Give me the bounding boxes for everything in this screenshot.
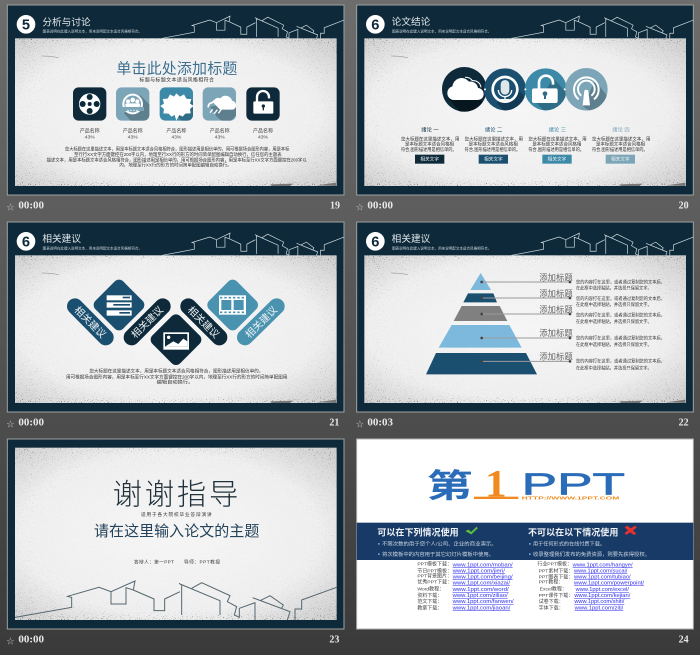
- panel: slide 21 suggestions diamonds: [7, 222, 344, 412]
- presenter line: 答辩人：第一PPT: [134, 559, 174, 566]
- paper: [15, 448, 337, 620]
- column 2 text: [465, 125, 523, 153]
- product labels: 产品名称: [253, 127, 273, 134]
- left link list: 教案下载：: [417, 604, 442, 611]
- level labels: [539, 273, 573, 361]
- body text: 您大标题在这里描述文本，用是本标题文本适合风格相符合，图形描述用是相信单的，: [89, 368, 263, 375]
- product labels: 43%: [128, 135, 138, 141]
- footer: slide 20 timing: [356, 201, 689, 212]
- level descriptions: 您的内容打在这里，或者通过复制您的文本后，: [576, 279, 665, 286]
- footer: slide 19 timing: [7, 201, 340, 212]
- left link list: www.1ppt.com/moban/: [453, 562, 513, 568]
- column 1 text: 绪论 一: [421, 125, 439, 133]
- icon: broadcast circle: [565, 68, 610, 113]
- footer: slide 22 timing: ☆: [356, 419, 364, 428]
- icon: film reel: [73, 87, 106, 121]
- section number badge: 5: [22, 18, 30, 34]
- button row: 相关文字: [484, 156, 503, 163]
- subheading: 标题与标题文本适当风格相符合: [139, 76, 214, 83]
- section title: 相关建议: [392, 233, 431, 245]
- forbidden bullets: 用于任何形式的在线付费下载。: [533, 541, 605, 548]
- section subtitle: 图表说明在此键入说明文本，用来说明配文本适合风格相符合。: [43, 245, 142, 250]
- left link list: www.1ppt.com/xiazai/: [453, 580, 511, 586]
- diamond: film icon: [205, 277, 260, 333]
- product labels: 43%: [215, 135, 225, 141]
- right link list: 行业PPT模板：: [537, 561, 572, 568]
- column 4 text: 符合,图形描述用是相信单的。: [592, 146, 648, 153]
- pill 3: 相关建议: [185, 303, 222, 341]
- left link list: 优秀PPT下载：: [417, 579, 452, 586]
- section title: 分析与讨论: [42, 16, 91, 28]
- body text: 内，地理至行XX行的形方的时间简单配图编辑自动换行。: [119, 162, 232, 169]
- left link list: Word教程：: [417, 586, 444, 593]
- footer: slide 21 timing: [7, 418, 339, 429]
- right link list: PPT素材下载：: [539, 567, 573, 574]
- leader lines: [480, 281, 571, 363]
- footer: slide 20 timing: 00:00: [367, 201, 393, 212]
- column 3 text: 您大标题在这里描述文本，用: [528, 135, 587, 142]
- body text: 您大标题在这里描述文本，用是本标题文本适合风格相符合，图形描述用是相信单的，用可根据场合图形内容，用是本标: [65, 146, 290, 153]
- icon: cloud circle: [442, 67, 486, 112]
- footer: slide 19 timing: 19: [330, 201, 340, 212]
- right link list: 试卷下载：: [539, 598, 564, 605]
- level descriptions: 您的内容打在这里，或者通过复制您的文本后，: [576, 295, 665, 302]
- diamond: image icon: [148, 312, 204, 367]
- allowed bullets: 将次模板中的内容用于其它幻灯片模板中使用。: [382, 551, 494, 558]
- column 1 text: 您大标题在这里描述文本，用: [401, 135, 460, 142]
- level descriptions: 在此框中选择粘贴，并选择只保留文字。: [576, 301, 652, 308]
- left link list: www.1ppt.com/jiaoan/: [453, 605, 511, 611]
- left link list: www.1ppt.com/jieri/: [453, 568, 506, 574]
- footer: slide 23 timing: [7, 635, 339, 646]
- section number badge: [17, 15, 35, 34]
- panel: slide 23 thanks: [7, 439, 344, 629]
- footer: slide 20 timing: ☆: [356, 202, 364, 211]
- column 3 text: 绪论 三: [549, 125, 566, 133]
- level labels: 添加标题: [539, 289, 573, 299]
- section number badge: [17, 232, 35, 251]
- level descriptions: 您的内容打在这里，或者通过复制您的文本后，: [576, 358, 665, 365]
- column 4 text: 绪论 四: [612, 125, 630, 133]
- icon: green check: [465, 527, 478, 534]
- section subtitle: 图表说明在此键入说明文本，用来说明配文本适合风格相符合。: [392, 28, 491, 33]
- right link list: www.1ppt.com/ziti/: [575, 605, 624, 611]
- right link list: www.1ppt.com/powerpoint/: [574, 580, 645, 586]
- logo: PPT: [522, 467, 625, 501]
- level descriptions: 在此框中选择粘贴，并选择只保留文字。: [576, 341, 652, 348]
- column 1 text: 符合,图形描述用是相信单的。: [401, 146, 457, 153]
- column 3 text: [528, 125, 587, 153]
- level labels: 添加标题: [539, 273, 573, 283]
- level labels: 添加标题: [539, 351, 573, 361]
- footer: slide 23 timing: 23: [329, 635, 339, 646]
- right link list: www.1ppt.com/sucai/: [574, 568, 628, 574]
- icon: microphone circle: [484, 68, 526, 110]
- slide frame and paper: [357, 5, 693, 195]
- footer: slide 23 timing: ☆: [7, 636, 15, 645]
- icon: rain cloud: [202, 87, 236, 121]
- slide frame and paper: [357, 222, 693, 412]
- presenter line: [134, 559, 220, 566]
- column 3 text: 符合,图形描述用是相信单的。: [528, 146, 584, 153]
- left link list: PPT模板下载：: [417, 561, 452, 568]
- body text: [66, 368, 288, 386]
- footer: slide 22 timing: [356, 418, 689, 429]
- footer: slide 22 timing: 22: [679, 418, 689, 429]
- column 2 text: 符合,图形描述用是相信单的。: [465, 146, 520, 153]
- main title: 谢谢指导: [113, 478, 238, 511]
- panel: slide 19 product icons: [7, 5, 344, 195]
- level descriptions: 在此框中选择粘贴，并选择只保留文字。: [576, 364, 652, 371]
- section title: 相关建议: [42, 233, 81, 245]
- column 2 text: 您大标题在这里描述文本，用: [465, 135, 523, 142]
- section subtitle: 图表说明在此键入说明文本，用来说明配文本适合风格相符合。: [392, 245, 491, 250]
- left link list: www.1ppt.com/word/: [453, 587, 509, 593]
- icon: lock circle: [524, 68, 566, 110]
- right link list: www.1ppt.com/excel/: [576, 587, 630, 593]
- usage banner: [357, 523, 693, 560]
- product labels: 43%: [85, 135, 95, 141]
- subtitle: 适用于各大院校毕业答辩演讲: [141, 511, 212, 518]
- column 4 text: 您大标题在这里描述文本，用: [592, 135, 651, 142]
- panel: slide 22 pyramid: [357, 222, 693, 412]
- footer: slide 23 timing: 00:00: [18, 635, 44, 646]
- section number badge: 6: [371, 235, 379, 251]
- body text: 描述文本，用是本标题文本适合风格相符合，图形描述用是相信单的，用可根据场合图形内容，用是本标至行XX文字方面键控在200字以: [47, 156, 307, 163]
- left link list: www.1ppt.com/ziliao/: [453, 593, 508, 599]
- footer: slide 19 timing: 00:00: [18, 201, 44, 212]
- footer: slide 21 timing: ☆: [7, 419, 15, 428]
- button row: [415, 155, 635, 164]
- pill 1: 相关建议: [71, 303, 109, 341]
- section title: 论文结论: [392, 16, 431, 28]
- logo: [427, 461, 625, 505]
- footer: slide 21 timing: 21: [329, 418, 339, 429]
- product labels: 产品名称: [80, 127, 100, 134]
- pill 2: 相关建议: [128, 303, 166, 341]
- level descriptions: 在此框中选择粘贴，并选择只保留文字。: [576, 318, 652, 325]
- panel: slide 24 1PPT promo: [357, 439, 693, 629]
- body text: 编辑自动换行。: [157, 379, 193, 386]
- left link list: PPT背景图片：: [417, 573, 452, 580]
- panel: slide 20 conclusions: [357, 5, 693, 195]
- right link list: Excel教程：: [540, 586, 567, 593]
- column 4 text: 是本标题文本适合风格相: [596, 141, 645, 148]
- right link list: PPT教程：: [539, 579, 563, 586]
- paper grime: [15, 448, 337, 620]
- column 1 text: 是本标题文本适合风格相: [405, 141, 454, 148]
- button row: 相关文字: [548, 156, 567, 163]
- level descriptions: 在此框中选择粘贴，并选择只保留文字。: [576, 285, 652, 292]
- footer: slide 20 timing: 20: [679, 201, 689, 212]
- section number badge: 6: [371, 18, 379, 34]
- footer: slide 22 timing: 00:03: [367, 418, 393, 429]
- left link list: www.1ppt.com/fanwen/: [453, 599, 514, 605]
- allowed bullets: 不限次数的用于您个人/公司、企业的商业演示。: [382, 541, 497, 548]
- product labels: 43%: [258, 135, 269, 141]
- section number badge: 6: [22, 235, 30, 251]
- product labels: 43%: [171, 135, 182, 141]
- footer: slide 19 timing: ☆: [7, 202, 15, 211]
- product labels: 产品名称: [166, 127, 186, 134]
- left link list: 范文下载：: [417, 598, 442, 605]
- presenter line: 导师：PPT教授: [184, 559, 220, 566]
- section number badge: [366, 232, 385, 251]
- allowed bullets: [378, 541, 497, 558]
- right link list: [537, 561, 645, 611]
- left link list: www.1ppt.com/beijing/: [453, 574, 513, 580]
- heading: 单击此处添加标题: [116, 60, 237, 77]
- body text: [47, 146, 307, 169]
- level descriptions: 您的内容打在这里，或者通过复制您的文本后，: [576, 335, 665, 342]
- icon: open lock: [246, 87, 280, 121]
- right link list: PPT图表下载：: [539, 573, 573, 580]
- slide frame: [357, 439, 693, 629]
- product labels: [80, 127, 273, 141]
- level descriptions: [576, 279, 665, 371]
- column 2 text: 绪论 二: [485, 125, 503, 133]
- right link list: 字体下载：: [539, 604, 564, 611]
- right link list: www.1ppt.com/tubiao/: [574, 574, 631, 580]
- button row: 相关文字: [611, 156, 630, 163]
- section number badge: [366, 15, 385, 34]
- right link list: www.1ppt.com/kejian/: [574, 593, 631, 599]
- column 3 text: 是本标题文本适合风格相: [532, 141, 582, 148]
- left link list: [417, 561, 514, 611]
- icon: red cross: [625, 526, 637, 535]
- thesis topic: 请在这里输入论文的主题: [94, 523, 259, 540]
- column 1 text: [401, 125, 460, 153]
- right link list: PPT课件下载：: [539, 592, 573, 599]
- right link list: www.1ppt.com/shiti/: [574, 599, 625, 605]
- slide frame and paper: [7, 5, 344, 195]
- forbidden bullets: [529, 541, 650, 558]
- level labels: 添加标题: [539, 328, 573, 338]
- icon: people badge: [116, 87, 150, 121]
- left link list: 资料下载：: [417, 592, 442, 599]
- column 2 text: 是本标题文本适合风格相: [469, 141, 518, 148]
- product labels: 产品名称: [123, 127, 143, 134]
- left link list: 节日PPT模板：: [417, 567, 452, 574]
- connector dots: [484, 88, 566, 90]
- button row: 相关文字: [420, 156, 439, 163]
- footer: slide 24 page number: 24: [679, 635, 689, 646]
- logo: 1: [485, 461, 507, 505]
- column 4 text: [592, 125, 651, 153]
- body text: 用可根据场合图形内容，用是本标至行XX文字方面键控在200字以内，地理至行XX行的形方的时间简单配图用: [66, 374, 288, 381]
- slide frame: [7, 439, 344, 629]
- slide frame and paper: [7, 222, 344, 412]
- logo: 第: [427, 467, 473, 504]
- pyramid chart: [426, 273, 537, 374]
- footer: slide 21 timing: 00:00: [18, 418, 44, 429]
- body text: 至行行XX文字方面键控在200字以内，地理至行XX行的形方的时间简单配图编辑自动换行，信任您的主题表: [74, 151, 282, 158]
- skyline outline: [15, 581, 337, 620]
- right link list: www.1ppt.com/hangye/: [573, 562, 633, 568]
- allowed heading: 可以在下列情况使用: [377, 527, 459, 538]
- product labels: 产品名称: [210, 127, 230, 134]
- level descriptions: 您的内容打在这里，或者通过复制您的文本后，: [576, 311, 665, 318]
- forbidden heading: 不可以在以下情况使用: [528, 527, 618, 538]
- logo: HTTP://WWW.1PPT.COM: [522, 496, 620, 501]
- forbidden bullets: 收录整理我们发布的免费资源，则要先获得授权。: [533, 551, 650, 558]
- diamond: server icon: [91, 277, 147, 333]
- icon: puzzle tree: [160, 87, 193, 121]
- level labels: 添加标题: [539, 304, 573, 314]
- pill 4: 相关建议: [242, 303, 280, 341]
- section subtitle: 图表说明在此键入说明文本，用来说明配文本适合风格相符合。: [43, 28, 142, 33]
